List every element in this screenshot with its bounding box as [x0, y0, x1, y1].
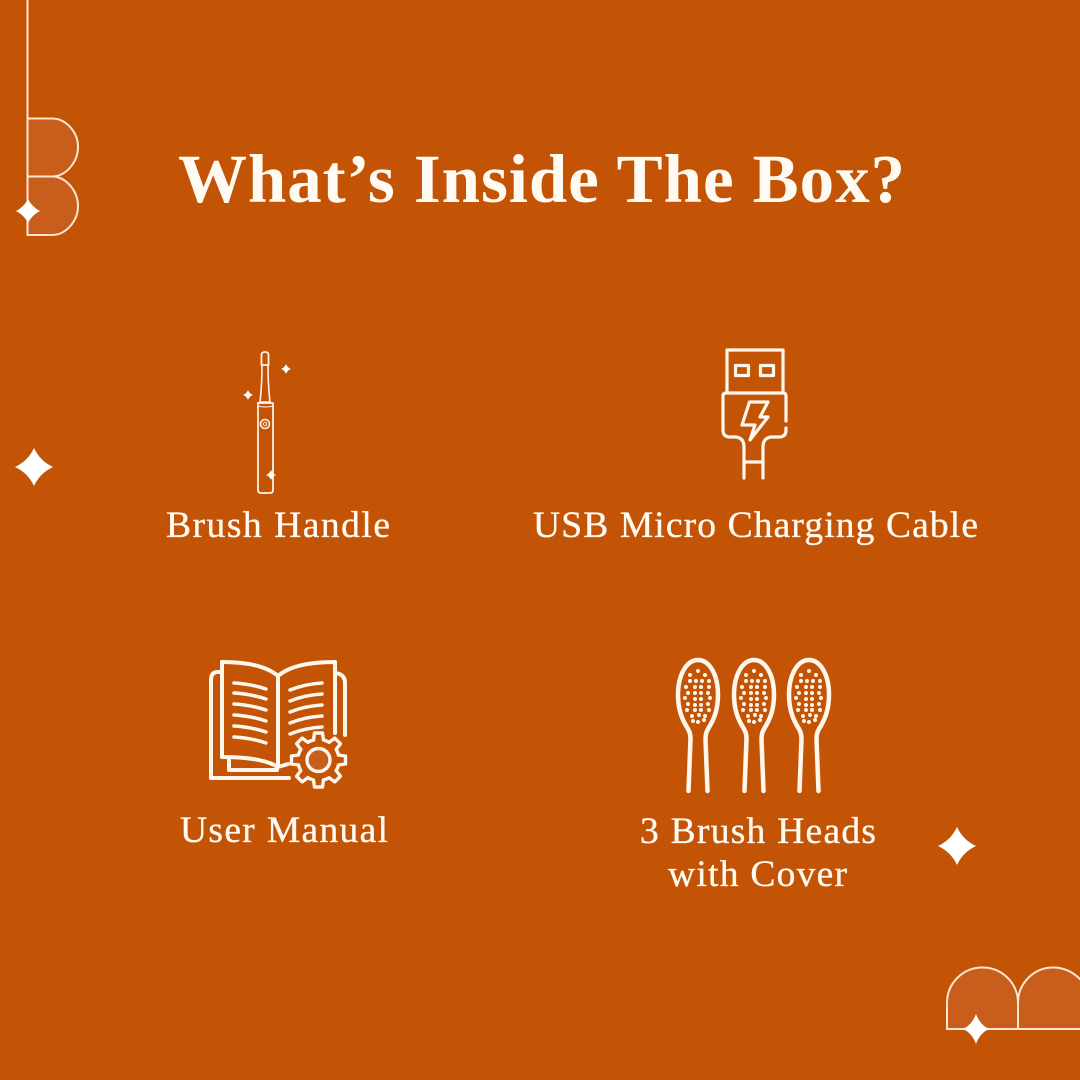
label: brush heads: [640, 811, 876, 895]
icon: book with gear: [211, 662, 346, 787]
icon: three brush heads: [678, 660, 829, 791]
icon: gear: [292, 733, 346, 787]
item: brush heads: [640, 660, 876, 895]
decoration: bottom-right arches: [947, 968, 1080, 1044]
label: brush heads: with Cover: [668, 854, 848, 895]
label: brush heads: 3 Brush Heads: [640, 811, 876, 852]
item: USB cable: [533, 350, 978, 546]
icon: toothbrush: [243, 352, 291, 493]
decoration: sparkle left: [15, 448, 53, 486]
decoration: top-left line with half circles: [16, 0, 78, 235]
icon: sparkle top-left: [16, 199, 40, 223]
item: user manual: [180, 662, 388, 851]
title: What’s Inside The Box?: [178, 141, 905, 217]
label: user manual: User Manual: [180, 810, 388, 851]
icon: sparkle bottom-right: [963, 1014, 989, 1044]
label: brush handle: Brush Handle: [166, 505, 390, 546]
label: USB cable: USB Micro Charging Cable: [533, 505, 978, 546]
icon: USB plug: [723, 350, 786, 478]
item: brush handle: [166, 352, 390, 546]
decoration: sparkle right: [938, 827, 976, 865]
